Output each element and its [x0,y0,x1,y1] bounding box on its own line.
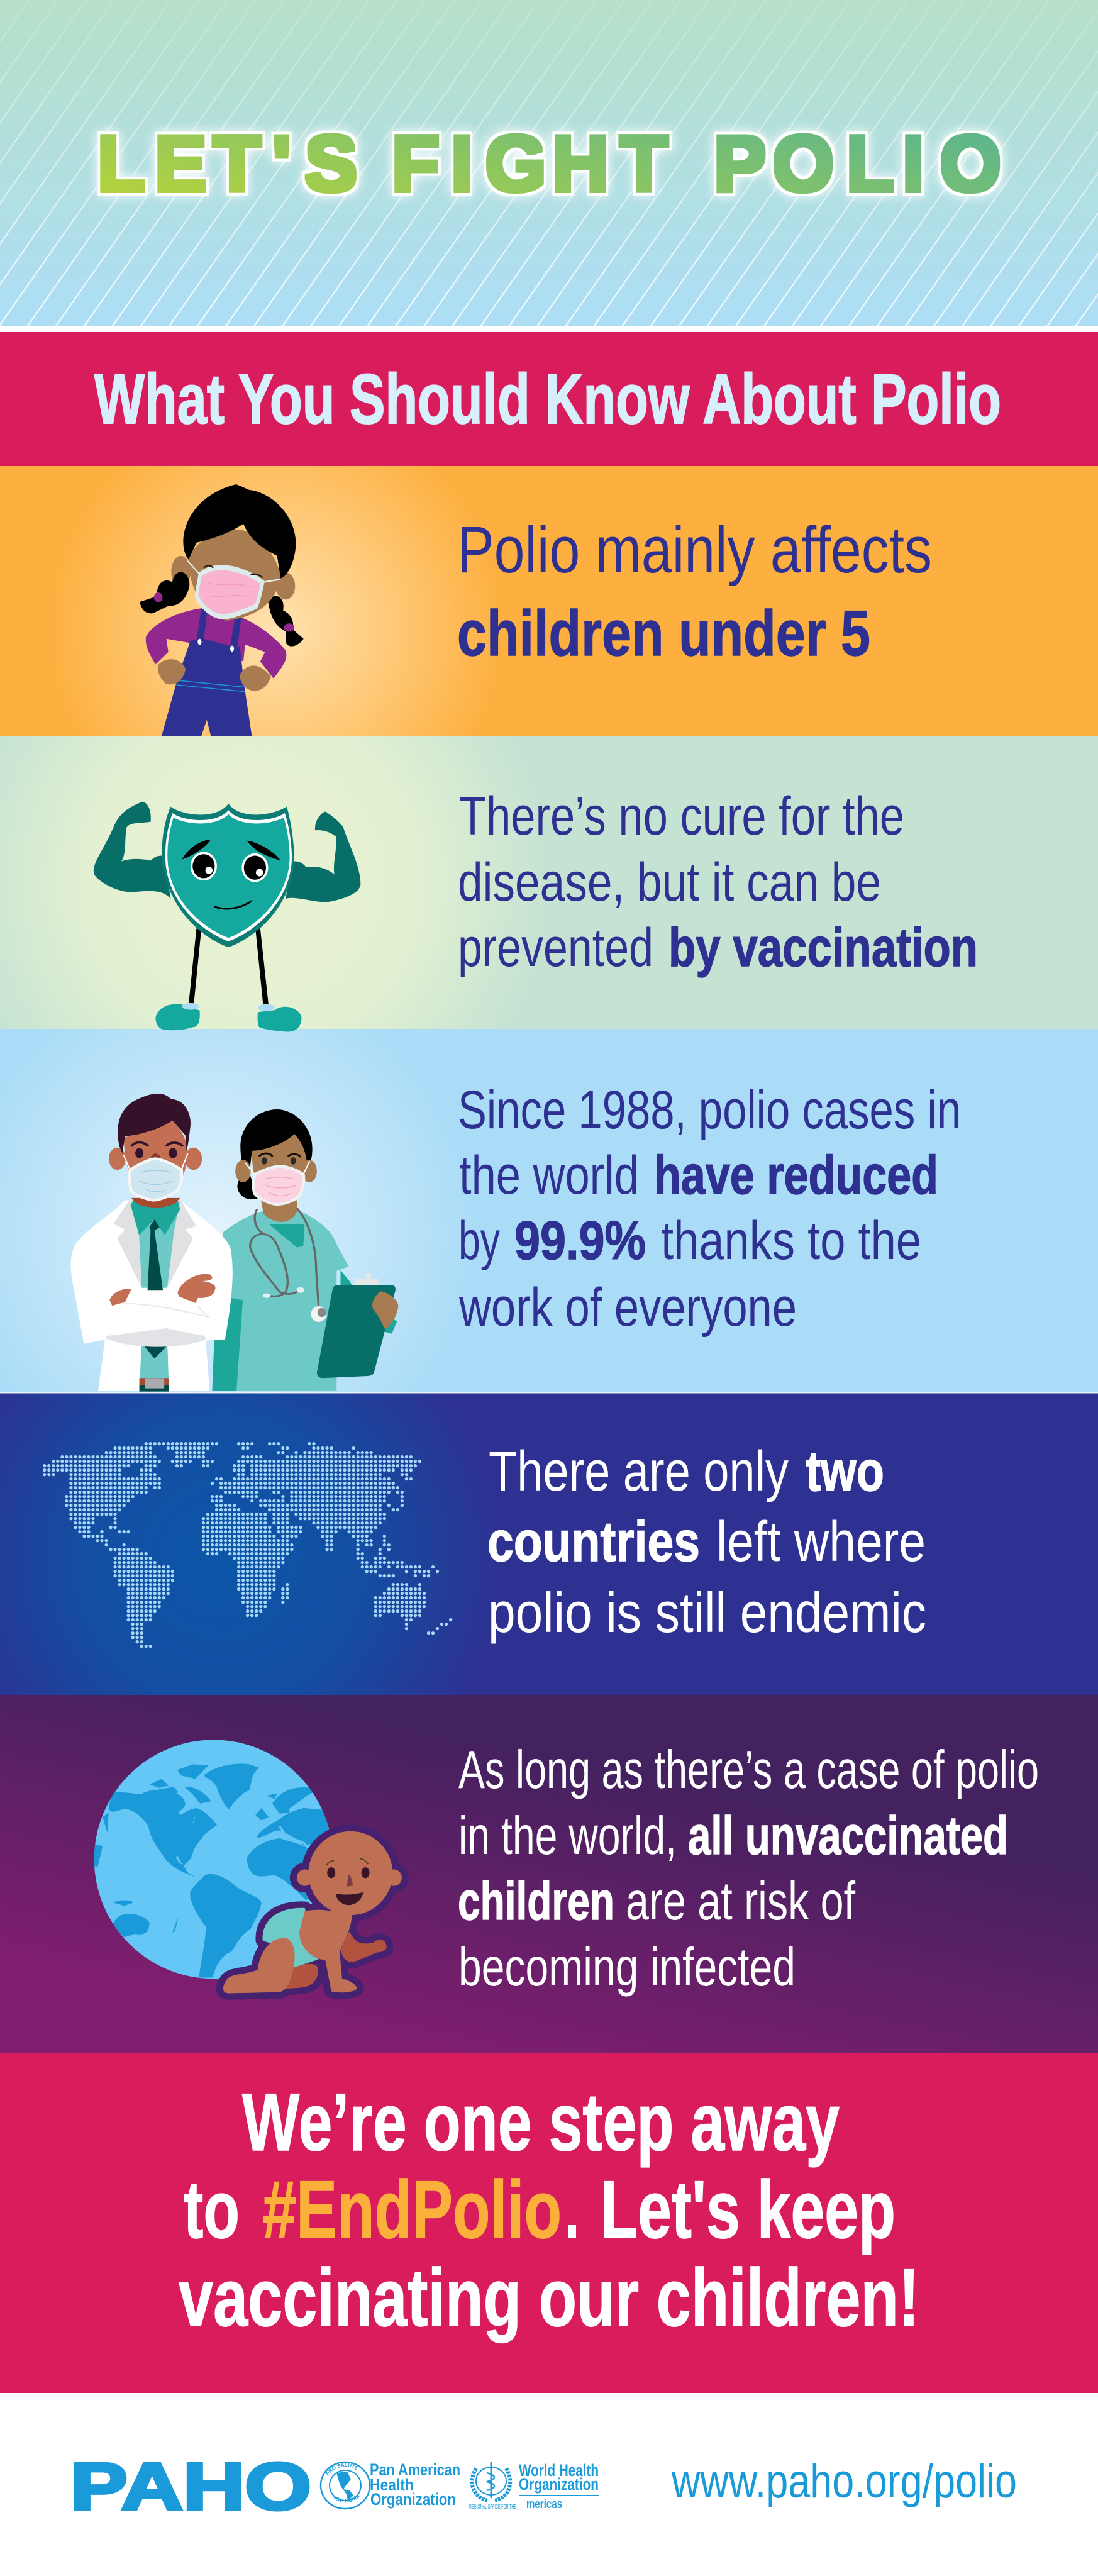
text: Pan American Health Organization [370,2460,460,2509]
text block: no cure: prevented [458,918,653,978]
text: Pan American Health Organization: Health [370,2475,414,2494]
text block: cases reduced: 99.9% [514,1211,646,1271]
panel: call to action [0,2053,1098,2393]
icon: dotted world map [45,1444,451,1646]
text block: children under 5: Polio mainly affects [457,513,932,587]
logo: WHO emblem [472,2462,510,2501]
text block: at risk: children [458,1872,614,1931]
text block: cases reduced: thanks to the [661,1211,921,1271]
callout text: We’re one step away [242,2076,840,2168]
panel: header banner [0,0,1098,332]
text: World Health Organization, Americas: Organization [519,2475,599,2494]
panel: cases reduced [0,1029,1098,1392]
text block: two countries: left where [716,1511,926,1574]
text block: cases reduced: by [458,1211,500,1271]
text block: no cure: disease, but it can be [458,852,881,913]
logo: PAHO seal: PRO SALUTE [326,2463,358,2475]
text: Pan American Health Organization: Pan American [370,2460,460,2479]
nurse [212,1109,398,1391]
icon: girl with pink mask [140,484,304,736]
logo: PAHO seal [319,2462,371,2509]
text block: cases reduced: Since 1988, polio cases in [458,1080,961,1140]
title: LET'S FIGHT POLIO [97,121,1001,208]
icon: globe [94,1740,333,1979]
panel: endemic countries [0,1392,1098,1695]
panel: unvaccinated children at risk [0,1695,1098,2053]
stethoscope [250,1208,319,1308]
text block: two countries: There are only [489,1440,789,1503]
icon: crawling baby [223,1831,402,1993]
callout text [179,2076,919,2343]
panel: subheading band [0,332,1098,466]
text: World Health Organization, Americas: World Health [519,2461,599,2480]
text block: children under 5 [457,513,932,669]
callout text: to [184,2163,240,2255]
callout text: #EndPolio [262,2163,562,2255]
text block: at risk: are at risk of [626,1872,855,1931]
text block: at risk: all unvaccinated [688,1806,1008,1866]
text block: cases reduced: the world [459,1145,639,1206]
text: website URL: www.paho.org/polio [671,2455,1017,2508]
text block: two countries: two [806,1440,884,1503]
callout text: . [565,2163,579,2255]
clipboard [355,1274,379,1288]
text: Pan American Health Organization: Organization [370,2490,456,2509]
text block: two countries: polio is still endemic [488,1582,926,1645]
text block: no cure: by vaccination [668,918,978,978]
panel: footer [70,2450,1017,2524]
doctor [71,1094,233,1392]
callout text: Let's keep [601,2163,896,2255]
text block: children under 5: children under 5 [457,597,870,669]
panel: children under 5 [0,466,1098,736]
text block: cases reduced [458,1080,961,1338]
text: World Health Organization, Americas: REGIONAL OFFICE FOR THE [469,2504,516,2511]
text block: at risk: in the world, [458,1806,677,1866]
text block: no cure: There’s no cure for the [459,786,904,847]
text block: at risk: becoming infected [458,1938,796,1997]
text block: at risk [458,1740,1039,1997]
text block: no cure [458,786,978,978]
logo: PAHO wordmark: PAHO [70,2450,311,2524]
icon: doctor and nurse [71,1094,398,1392]
panel: no cure, vaccination [0,736,1098,1029]
text block: cases reduced: have reduced [654,1145,938,1206]
text: World Health Organization, Americas: mericas [526,2497,562,2511]
logo: PAHO seal: NOVI MUNDI [332,2494,360,2503]
text: World Health Organization, Americas [469,2461,599,2511]
text block: two countries: countries [487,1511,700,1574]
icon: muscular shield character [94,802,360,1031]
text block: two countries [487,1440,926,1645]
text block: cases reduced: work of everyone [458,1277,797,1338]
